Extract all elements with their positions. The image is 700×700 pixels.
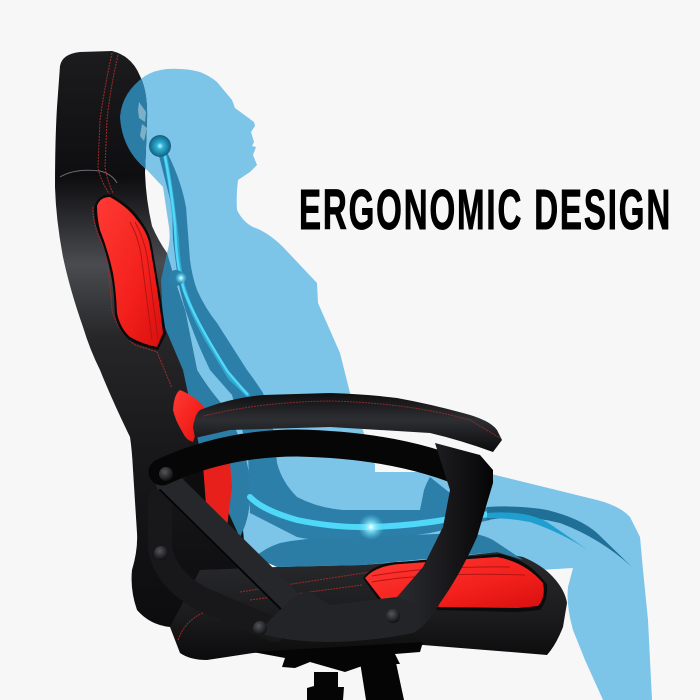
- center glow: [358, 514, 384, 540]
- red seat panel: [363, 554, 547, 612]
- armrest pad: [193, 393, 502, 452]
- title: ERGONOMIC DESIGN: [299, 178, 670, 241]
- body silhouette: [120, 69, 652, 700]
- spine highlight: [164, 150, 490, 527]
- icon: headrest logo: [138, 102, 147, 141]
- thigh overlap on seat: [255, 533, 523, 567]
- gas cylinder: [360, 658, 404, 700]
- front loop: [385, 443, 493, 633]
- diagonal strut: [168, 482, 300, 612]
- chair base mechanism: [253, 642, 423, 700]
- lower back red panel behind arm frame: [184, 463, 232, 527]
- spine joints: [149, 135, 187, 286]
- seat cushion: [170, 552, 567, 660]
- chair foot: [307, 672, 344, 700]
- top arch: [162, 443, 470, 476]
- armrest frame: [154, 443, 493, 642]
- bolts: [154, 467, 400, 635]
- headrest seam: [60, 170, 117, 183]
- frame bottom bar: [257, 590, 418, 642]
- lower frame piece: [160, 500, 275, 630]
- spine band: [157, 145, 490, 542]
- stitching: [93, 53, 172, 388]
- chair backrest: [55, 51, 262, 627]
- red back panel: [94, 194, 166, 350]
- body overlap on backrest: [120, 78, 250, 536]
- lower red panel upper: [173, 390, 205, 442]
- spine tail: [487, 506, 632, 567]
